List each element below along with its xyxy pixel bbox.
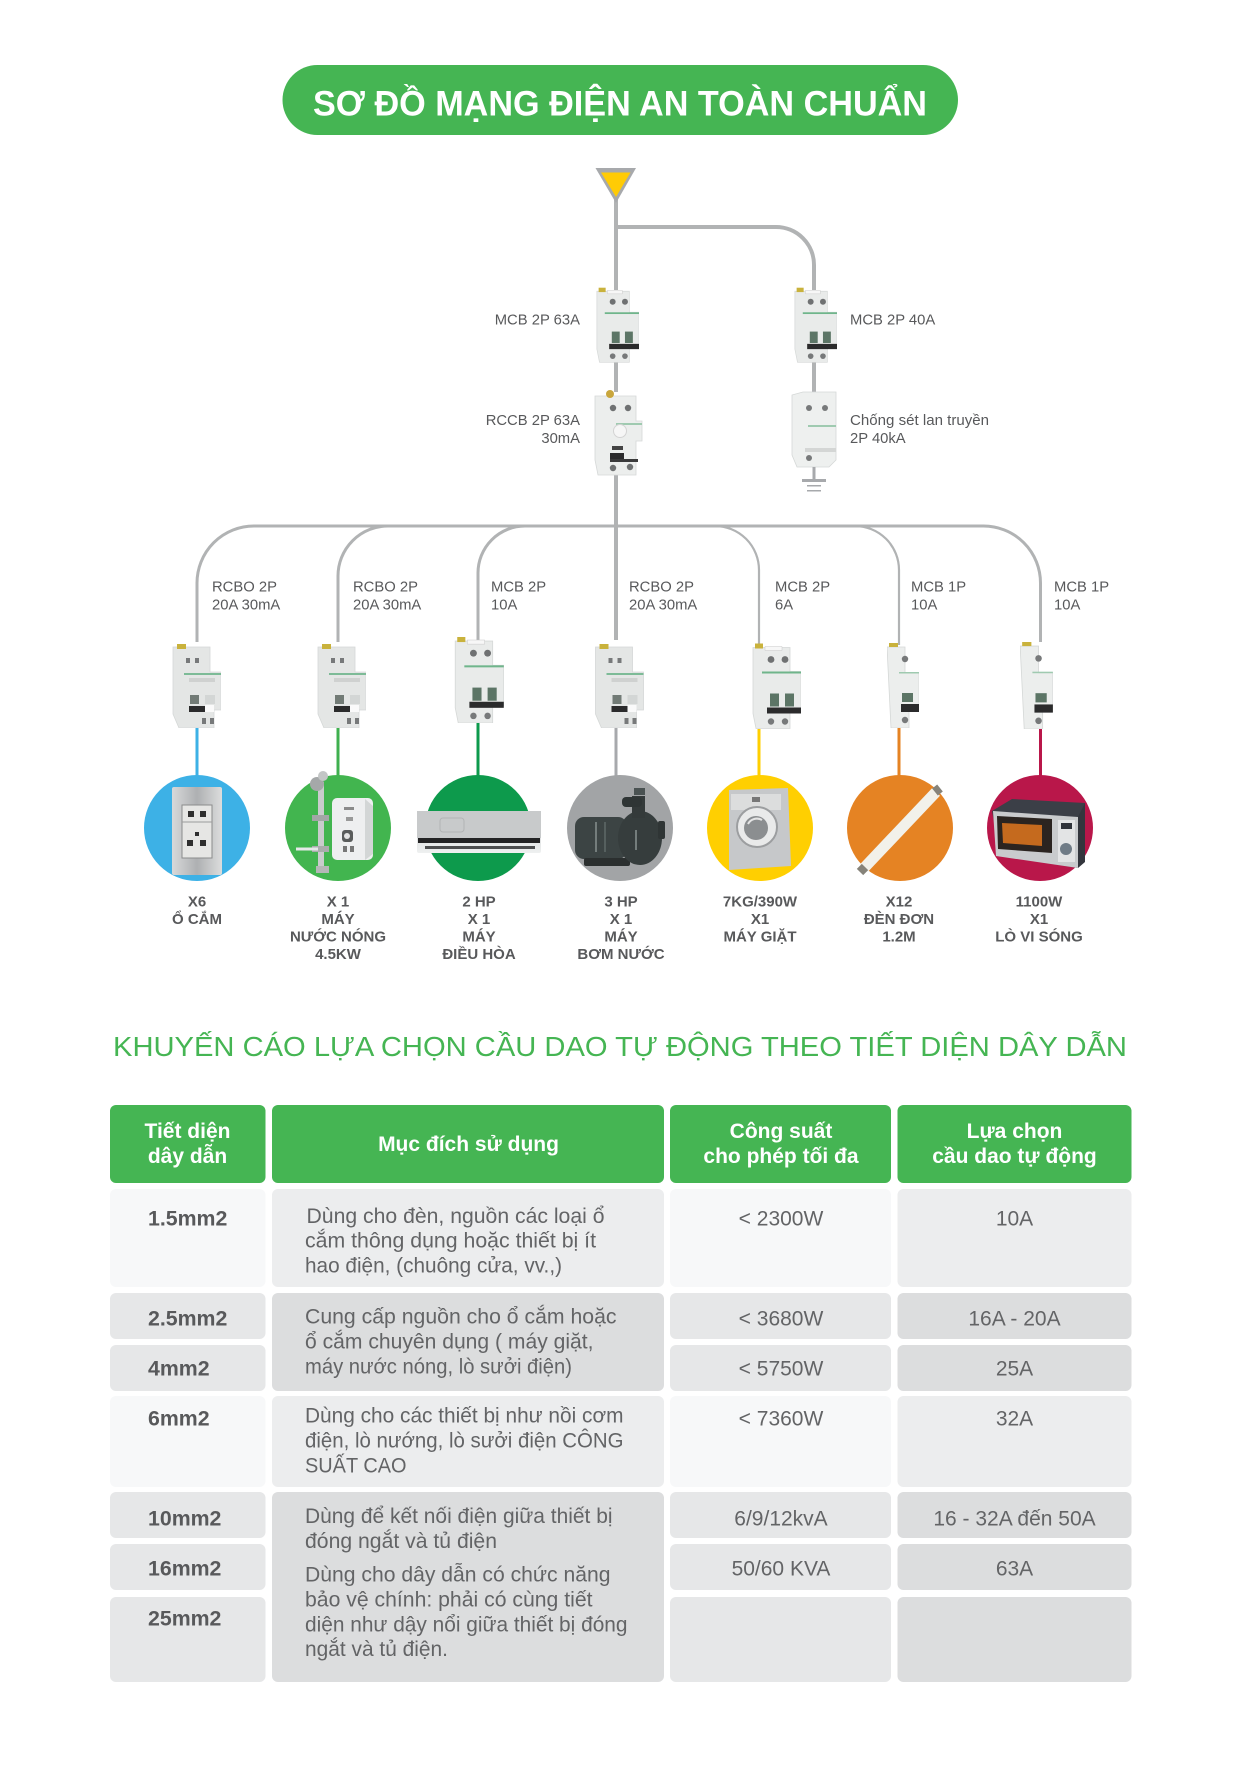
table header: cho phép tối đa [703, 1145, 859, 1168]
circuit 5: washing machine: 6A [775, 598, 793, 614]
label: RCCB 2P 63A 30mA: RCCB 2P 63A [486, 413, 580, 429]
circuit 4: water pump: X 1 [610, 911, 632, 928]
heading: recommendation: KHUYẾN CÁO LỰA CHỌN CẦU DAO TỰ ĐỘNG THEO TIẾT DIỆN DÂY DẪN [113, 1031, 1127, 1062]
label: MCB 2P 40A: MCB 2P 40A [850, 312, 935, 328]
icon: water heater [296, 771, 373, 873]
breaker: surge protector [792, 392, 836, 467]
table rows: 10mm2, 16mm2 and 25mm2: 25mm2 [148, 1606, 221, 1630]
table header [110, 1105, 1132, 1183]
icon: air conditioner [417, 811, 541, 853]
circuit 4: water pump: RCBO 2P [629, 580, 694, 596]
circuit 3: air conditioner [417, 580, 546, 963]
circuit 6: fluorescent tube: 1.2M [882, 928, 916, 946]
table header: Công suất [730, 1120, 832, 1143]
table rows: 2.5mm2 and 4mm2: 16A - 20A [968, 1308, 1061, 1330]
label: MCB 2P 63A: MCB 2P 63A [495, 312, 580, 328]
circuit 5: washing machine [707, 580, 830, 946]
table rows: 2.5mm2 and 4mm2: 25A [996, 1358, 1033, 1380]
circuit 6: fluorescent tube: X12 [886, 894, 912, 910]
circuit 2: water heater [285, 580, 421, 963]
icon: tube light [860, 788, 940, 872]
circuit 3: air conditioner: MÁY [462, 928, 496, 946]
label: surge protector: Chống sét lan truyền [850, 413, 989, 429]
title [282, 65, 958, 135]
table header: Mục đích sử dụng [378, 1133, 559, 1156]
table row: 1.5mm2: 1.5mm2 [148, 1206, 227, 1230]
diagram: supply wiring [197, 198, 1040, 645]
table rows: 2.5mm2 and 4mm2: máy nước nóng, lò sưởi điện) [305, 1356, 572, 1378]
table rows: 10mm2, 16mm2 and 25mm2: 10mm2 [148, 1506, 221, 1530]
table rows: 2.5mm2 and 4mm2: < 3680W [739, 1308, 823, 1330]
circuit 5: washing machine: MÁY GIẶT [723, 928, 797, 946]
breaker: MCB 2P 40A [795, 288, 837, 362]
circuit 6: fluorescent tube: MCB 1P [911, 580, 966, 596]
circuit 2: water heater: 4.5KW [315, 946, 362, 963]
circuit 6: fluorescent tube [847, 580, 966, 946]
table rows: 2.5mm2 and 4mm2: 4mm2 [148, 1356, 210, 1380]
circuit 2: water heater: 20A 30mA [353, 598, 421, 614]
circuit 2: water heater: X 1 [327, 894, 349, 910]
circuit 3: air conditioner: X 1 [468, 911, 490, 928]
label: RCCB 2P 63A 30mA [486, 413, 580, 447]
circuit 5: washing machine: MCB 2P [775, 580, 830, 596]
table rows: 10mm2, 16mm2 and 25mm2: 63A [996, 1558, 1033, 1580]
table row: 1.5mm2: < 2300W [739, 1208, 823, 1230]
circuit 3: air conditioner: 10A [491, 598, 517, 614]
circuit 7: microwave: 1100W [1016, 894, 1063, 910]
table header: dây dẫn [148, 1144, 227, 1168]
table rows: 10mm2, 16mm2 and 25mm2: đóng ngắt và tủ điện [305, 1530, 497, 1553]
circuit 3: air conditioner: MCB 2P [491, 580, 546, 596]
circuit 7: microwave: X1 [1030, 911, 1048, 928]
circuit 5: washing machine: X1 [751, 911, 769, 928]
table header: cầu dao tự động [932, 1145, 1097, 1168]
label: RCCB 2P 63A 30mA: 30mA [541, 431, 580, 447]
icon: supply triangle [596, 168, 636, 203]
table row: 6mm2: 32A [996, 1408, 1033, 1430]
table rows: 2.5mm2 and 4mm2: < 5750W [739, 1358, 823, 1380]
circuit 2: water heater: RCBO 2P [353, 580, 418, 596]
table rows: 2.5mm2 and 4mm2 [110, 1293, 1132, 1391]
table rows: 10mm2, 16mm2 and 25mm2: 50/60 KVA [732, 1558, 830, 1580]
table row: 1.5mm2: hao điện, (chuông cửa, vv.,) [305, 1254, 562, 1278]
circuit 1: socket: X6 [188, 894, 206, 910]
icon: ground [802, 467, 826, 492]
circuit 4: water pump [567, 580, 697, 963]
table rows: 10mm2, 16mm2 and 25mm2 [110, 1492, 1132, 1682]
table row: 6mm2: SUẤT CAO [305, 1454, 406, 1478]
circuit 1: socket: Ổ CẮM [172, 910, 222, 928]
circuit 3: air conditioner: ĐIỀU HÒA [442, 945, 516, 963]
icon: pump [575, 788, 665, 866]
table rows: 10mm2, 16mm2 and 25mm2: bảo vệ chính: phải có cùng tiết [305, 1588, 593, 1612]
table row: 1.5mm2: cắm thông dụng hoặc thiết bị ít [305, 1230, 596, 1252]
table row: 6mm2: Dùng cho các thiết bị như nồi cơm [305, 1404, 624, 1428]
table row: 1.5mm2: 10A [996, 1208, 1033, 1230]
table rows: 10mm2, 16mm2 and 25mm2: Dùng để kết nối điện giữa thiết bị [305, 1505, 612, 1528]
circuit 1: socket: RCBO 2P [212, 580, 277, 596]
label: surge protector: 2P 40kA [850, 431, 906, 447]
table rows: 10mm2, 16mm2 and 25mm2: diện như dậy nổi giữa thiết bị đóng [305, 1614, 628, 1636]
table row: 1.5mm2: Dùng cho đèn, nguồn các loại ổ [306, 1205, 604, 1228]
label: surge protector [850, 413, 989, 447]
breaker: RCCB 2P 63A [595, 390, 642, 475]
circuit 2: water heater: NƯỚC NÓNG [290, 928, 386, 946]
table rows: 2.5mm2 and 4mm2: 2.5mm2 [148, 1306, 227, 1330]
icon: wall socket [172, 787, 222, 875]
circuit 4: water pump: BƠM NƯỚC [577, 945, 665, 963]
breaker: MCB 2P 63A [597, 288, 639, 362]
table rows: 10mm2, 16mm2 and 25mm2: ngắt và tủ điện. [305, 1638, 448, 1661]
circuit 7: microwave: LÒ VI SÓNG [995, 928, 1083, 946]
circuit 1: socket [144, 580, 280, 928]
table row: 6mm2: < 7360W [739, 1408, 823, 1430]
table rows: 10mm2, 16mm2 and 25mm2: 16mm2 [148, 1556, 221, 1580]
title: SƠ ĐỒ MẠNG ĐIỆN AN TOÀN CHUẨN [313, 84, 927, 124]
table row: 1.5mm2 [110, 1189, 1132, 1287]
circuit 7: microwave: MCB 1P [1054, 580, 1109, 596]
circuit 1: socket: 20A 30mA [212, 598, 280, 614]
circuit 4: water pump: 20A 30mA [629, 598, 697, 614]
circuit 6: fluorescent tube: ĐÈN ĐƠN [864, 911, 934, 928]
table rows: 2.5mm2 and 4mm2: ổ cắm chuyên dụng ( máy giặt, [305, 1330, 594, 1354]
table rows: 10mm2, 16mm2 and 25mm2: Dùng cho dây dẫn có chức năng [305, 1564, 610, 1586]
table header: Lựa chọn [967, 1120, 1062, 1143]
table row: 6mm2 [110, 1396, 1132, 1487]
circuit 2: water heater: MÁY [321, 911, 355, 928]
table row: 6mm2: 6mm2 [148, 1406, 210, 1430]
icon: microwave [992, 799, 1085, 868]
table rows: 10mm2, 16mm2 and 25mm2: 16 - 32A đến 50A [933, 1508, 1096, 1530]
table row: 6mm2: điện, lò nướng, lò sưởi điện CÔNG [305, 1430, 624, 1452]
icon: washing machine [729, 788, 791, 870]
table rows: 2.5mm2 and 4mm2: Cung cấp nguồn cho ổ cắm hoặc [305, 1306, 616, 1328]
circuit 3: air conditioner: 2 HP [462, 894, 496, 910]
circuit 6: fluorescent tube: 10A [911, 598, 937, 614]
circuit 5: washing machine: 7KG/390W [723, 894, 798, 910]
circuit 7: microwave [987, 580, 1109, 946]
circuit 4: water pump: 3 HP [604, 894, 638, 910]
table header: Tiết diện [145, 1120, 230, 1143]
circuit 7: microwave: 10A [1054, 598, 1080, 614]
circuit 4: water pump: MÁY [604, 928, 638, 946]
table rows: 10mm2, 16mm2 and 25mm2: 6/9/12kvA [734, 1508, 828, 1530]
